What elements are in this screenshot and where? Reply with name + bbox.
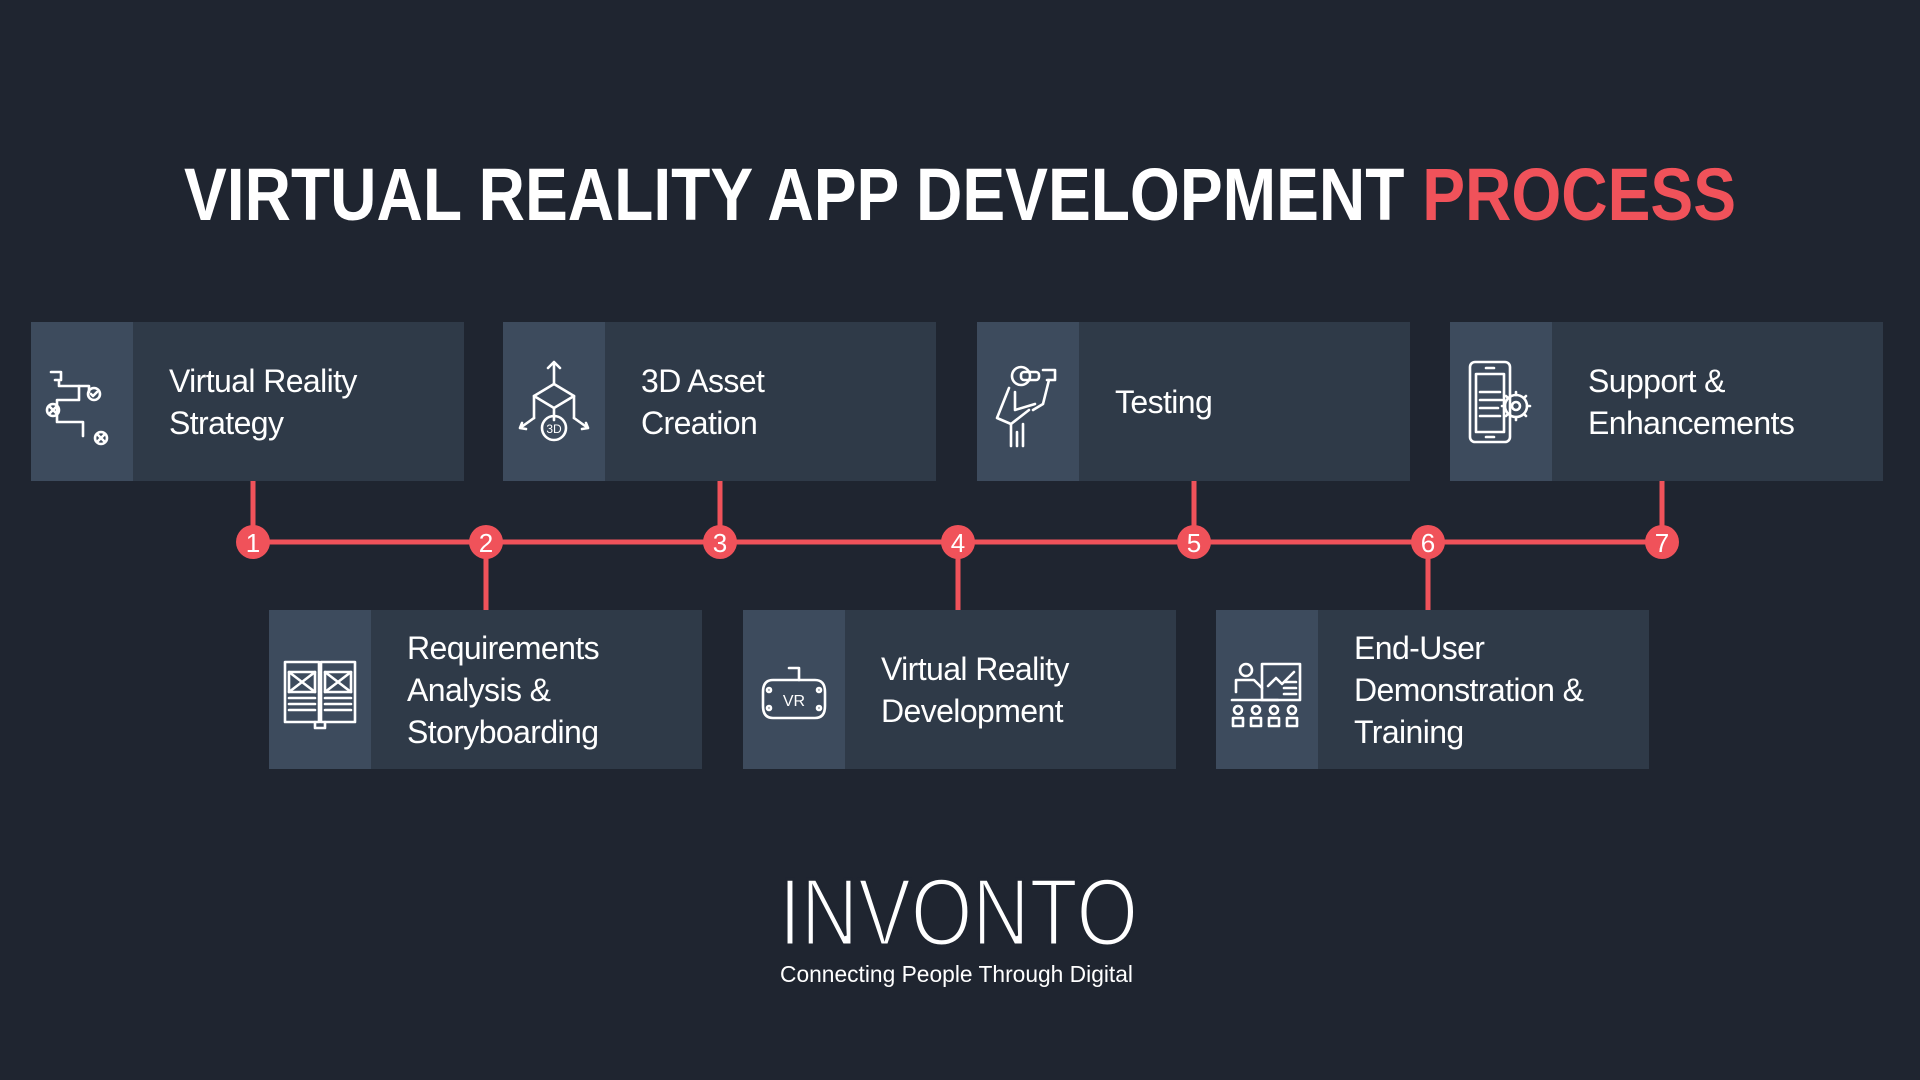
marker 7: 7 bbox=[1655, 528, 1669, 558]
icon: strategy flow bbox=[31, 322, 133, 481]
marker 2: 2 bbox=[479, 528, 493, 558]
icon: VR headset bbox=[743, 610, 845, 769]
text: Training bbox=[1354, 714, 1464, 750]
marker 7 bbox=[1645, 525, 1679, 559]
marker 3: 3 bbox=[713, 528, 727, 558]
icon: storyboard bbox=[269, 610, 371, 769]
panel: step 7 bbox=[1450, 322, 1883, 481]
panel: step 4 bbox=[743, 610, 1176, 769]
text: 3D Asset bbox=[641, 362, 764, 398]
marker 5 bbox=[1177, 525, 1211, 559]
marker 2 bbox=[469, 525, 503, 559]
title: VIRTUAL REALITY APP DEVELOPMENT PROCESS bbox=[184, 153, 1736, 236]
logo: INVONTO bbox=[779, 860, 1138, 966]
text: Storyboarding bbox=[407, 714, 598, 750]
icon: 3D cube bbox=[503, 322, 605, 481]
text bbox=[169, 362, 358, 440]
text bbox=[881, 650, 1070, 728]
marker 6 bbox=[1411, 525, 1445, 559]
text: Requirements bbox=[407, 630, 599, 666]
panel: step 5 bbox=[977, 322, 1410, 481]
tagline: Connecting People Through Digital bbox=[780, 961, 1133, 987]
text: Development bbox=[881, 692, 1063, 728]
marker 4: 4 bbox=[951, 528, 965, 558]
text bbox=[1354, 630, 1584, 750]
icon: 3D cube: 3D bbox=[546, 422, 562, 436]
text: Demonstration & bbox=[1354, 672, 1583, 708]
panel: step 1 bbox=[31, 322, 464, 481]
marker 3 bbox=[703, 525, 737, 559]
text: Support & bbox=[1588, 362, 1725, 398]
text bbox=[1588, 362, 1794, 440]
icon: tester bbox=[977, 322, 1079, 481]
panel: step 3 bbox=[503, 322, 936, 481]
text bbox=[407, 630, 599, 750]
icon: phone with gear bbox=[1450, 322, 1552, 481]
text: Strategy bbox=[169, 404, 283, 440]
text: Enhancements bbox=[1588, 404, 1794, 440]
text: Analysis & bbox=[407, 672, 550, 708]
text: Creation bbox=[641, 404, 757, 440]
marker 5: 5 bbox=[1187, 528, 1201, 558]
marker 4 bbox=[941, 525, 975, 559]
marker 6: 6 bbox=[1421, 528, 1435, 558]
text: Virtual Reality bbox=[169, 362, 357, 398]
text: End-User bbox=[1354, 630, 1484, 666]
marker 1 bbox=[236, 525, 270, 559]
panel: step 2 bbox=[269, 610, 702, 769]
icon: presentation to audience bbox=[1216, 610, 1318, 769]
text: Testing bbox=[1115, 384, 1212, 420]
panel: step 6 bbox=[1216, 610, 1649, 769]
marker 1: 1 bbox=[246, 528, 260, 558]
icon: VR headset: VR bbox=[783, 692, 805, 710]
text bbox=[641, 362, 765, 440]
text: Virtual Reality bbox=[881, 650, 1069, 686]
